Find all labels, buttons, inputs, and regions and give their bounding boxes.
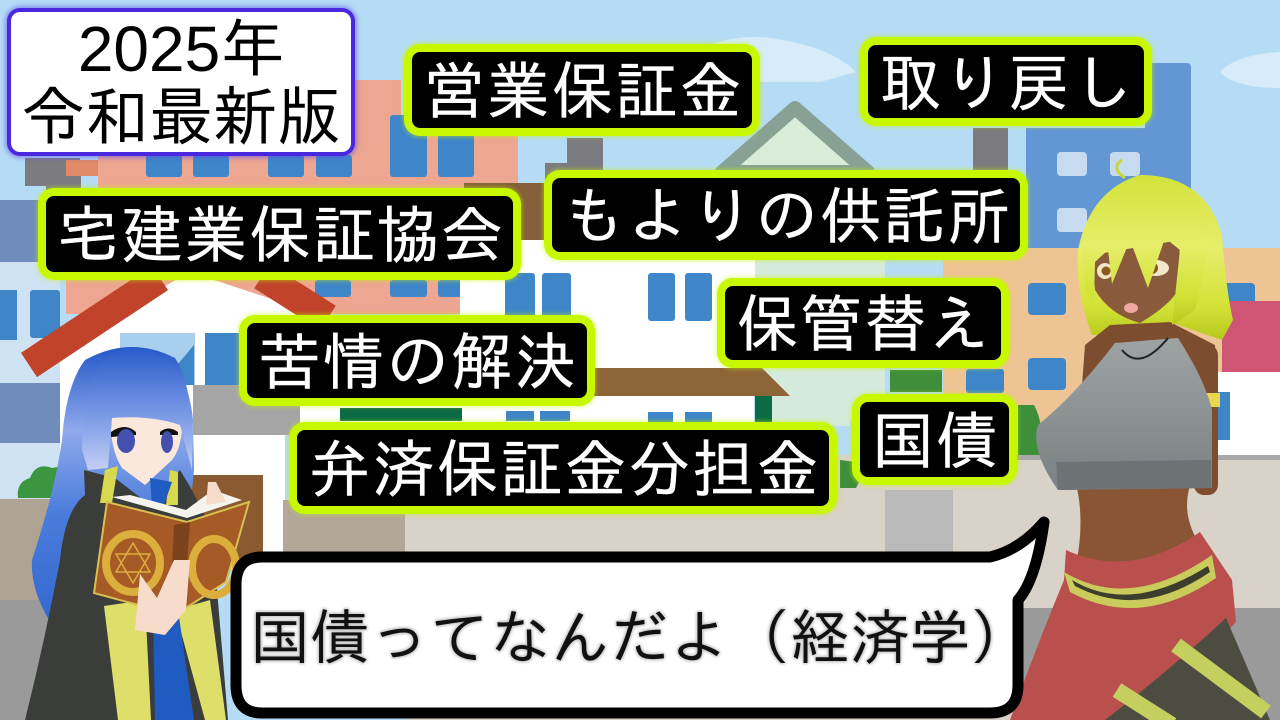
keyword: もよりの供託所: もよりの供託所 <box>564 184 1012 246</box>
dark coat <box>25 470 228 720</box>
badge: year and edition: 2025年 <box>78 13 284 85</box>
lower centre blocks <box>190 368 1280 720</box>
badge: year and edition <box>11 12 351 152</box>
yellow coat trim <box>100 466 178 505</box>
white central house <box>460 240 755 395</box>
keyword: 保管替え: 保管替え <box>736 292 992 354</box>
eyes <box>1097 263 1113 279</box>
book <box>94 502 249 615</box>
keyword: 宅建業保証協会: 宅建業保証協会 <box>57 203 505 265</box>
eyes <box>111 427 178 437</box>
ahoge <box>1117 160 1125 178</box>
clouds <box>680 37 1280 88</box>
hands <box>135 560 190 635</box>
back hair <box>1078 175 1233 340</box>
face <box>1092 240 1180 323</box>
midriff <box>1075 480 1200 570</box>
left blue-grey building <box>0 200 62 720</box>
badge: year and edition: 令和最新版 <box>21 81 341 153</box>
fringe <box>1082 178 1210 325</box>
fringe <box>82 348 193 470</box>
blue building <box>1026 63 1191 253</box>
tan building and pink building <box>890 248 1280 458</box>
keyword: 苦情の解決: 苦情の解決 <box>258 330 578 392</box>
keyword: 営業保証金: 営業保証金 <box>424 59 744 121</box>
necklace <box>1122 338 1168 359</box>
green-roof house <box>722 108 945 420</box>
salmon building <box>25 80 518 314</box>
keyword: 取り戻し: 取り戻し <box>880 50 1136 112</box>
skirt band <box>1064 555 1216 608</box>
grey chimneys and brown roof <box>464 128 1008 241</box>
face <box>110 412 182 485</box>
blue dress <box>153 610 194 720</box>
long hair <box>32 347 194 625</box>
neck and shoulders <box>1082 322 1218 385</box>
keyword: 国債: 国債 <box>872 408 1000 470</box>
red skirt <box>1010 532 1236 720</box>
grey top <box>1036 338 1212 490</box>
arm <box>1194 345 1218 495</box>
keyword: 弁済保証金分担金: 弁済保証金分担金 <box>308 437 820 499</box>
dark wrap <box>1105 618 1270 720</box>
speech bubble text: 国債ってなんだよ（経済学） <box>250 607 1030 667</box>
white red-roof house <box>29 272 335 500</box>
